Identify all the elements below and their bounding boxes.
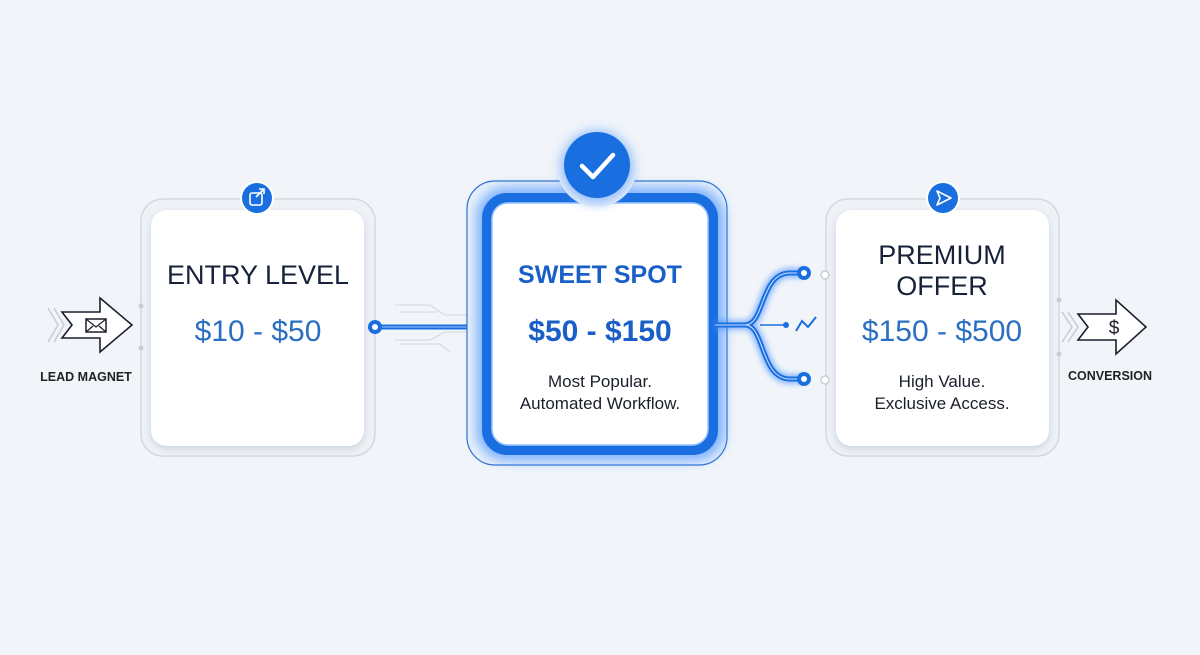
heading: sweet spot: SWEET SPOT: [518, 261, 682, 289]
heading: premium offer: PREMIUM: [878, 240, 1006, 270]
icon: conversion arrow: $: [1109, 318, 1120, 339]
description: sweet spot: Most Popular.: [548, 372, 652, 391]
panel: sweet spot: [467, 127, 727, 465]
icon: lead magnet arrow: [62, 298, 132, 352]
panel: premium offer: OFFER: [896, 271, 988, 301]
icon: trend: [796, 317, 816, 331]
price: premium: $150 - $500: [862, 315, 1022, 348]
connector: entry to sweet spot: [368, 305, 484, 352]
label: conversion: CONVERSION: [1068, 369, 1152, 383]
panel: lead magnet: [40, 298, 132, 384]
icon: check: [557, 127, 637, 207]
panel: conversion: [1062, 300, 1152, 383]
panel: premium offer: Exclusive Access.: [874, 394, 1010, 413]
price: entry: $10 - $50: [195, 315, 321, 348]
price: sweet spot: $50 - $150: [528, 315, 672, 348]
description: premium: High Value.: [899, 372, 985, 391]
panel: entry level: [138, 181, 375, 456]
panel: sweet spot: Automated Workflow.: [520, 394, 680, 413]
connector: sweet spot branch: [715, 266, 816, 386]
label: lead magnet: LEAD MAGNET: [40, 370, 132, 384]
panel: premium offer: [821, 181, 1062, 456]
icon: external link: [240, 181, 274, 215]
icon: send: [926, 181, 960, 215]
heading: entry level: ENTRY LEVEL: [167, 260, 349, 290]
